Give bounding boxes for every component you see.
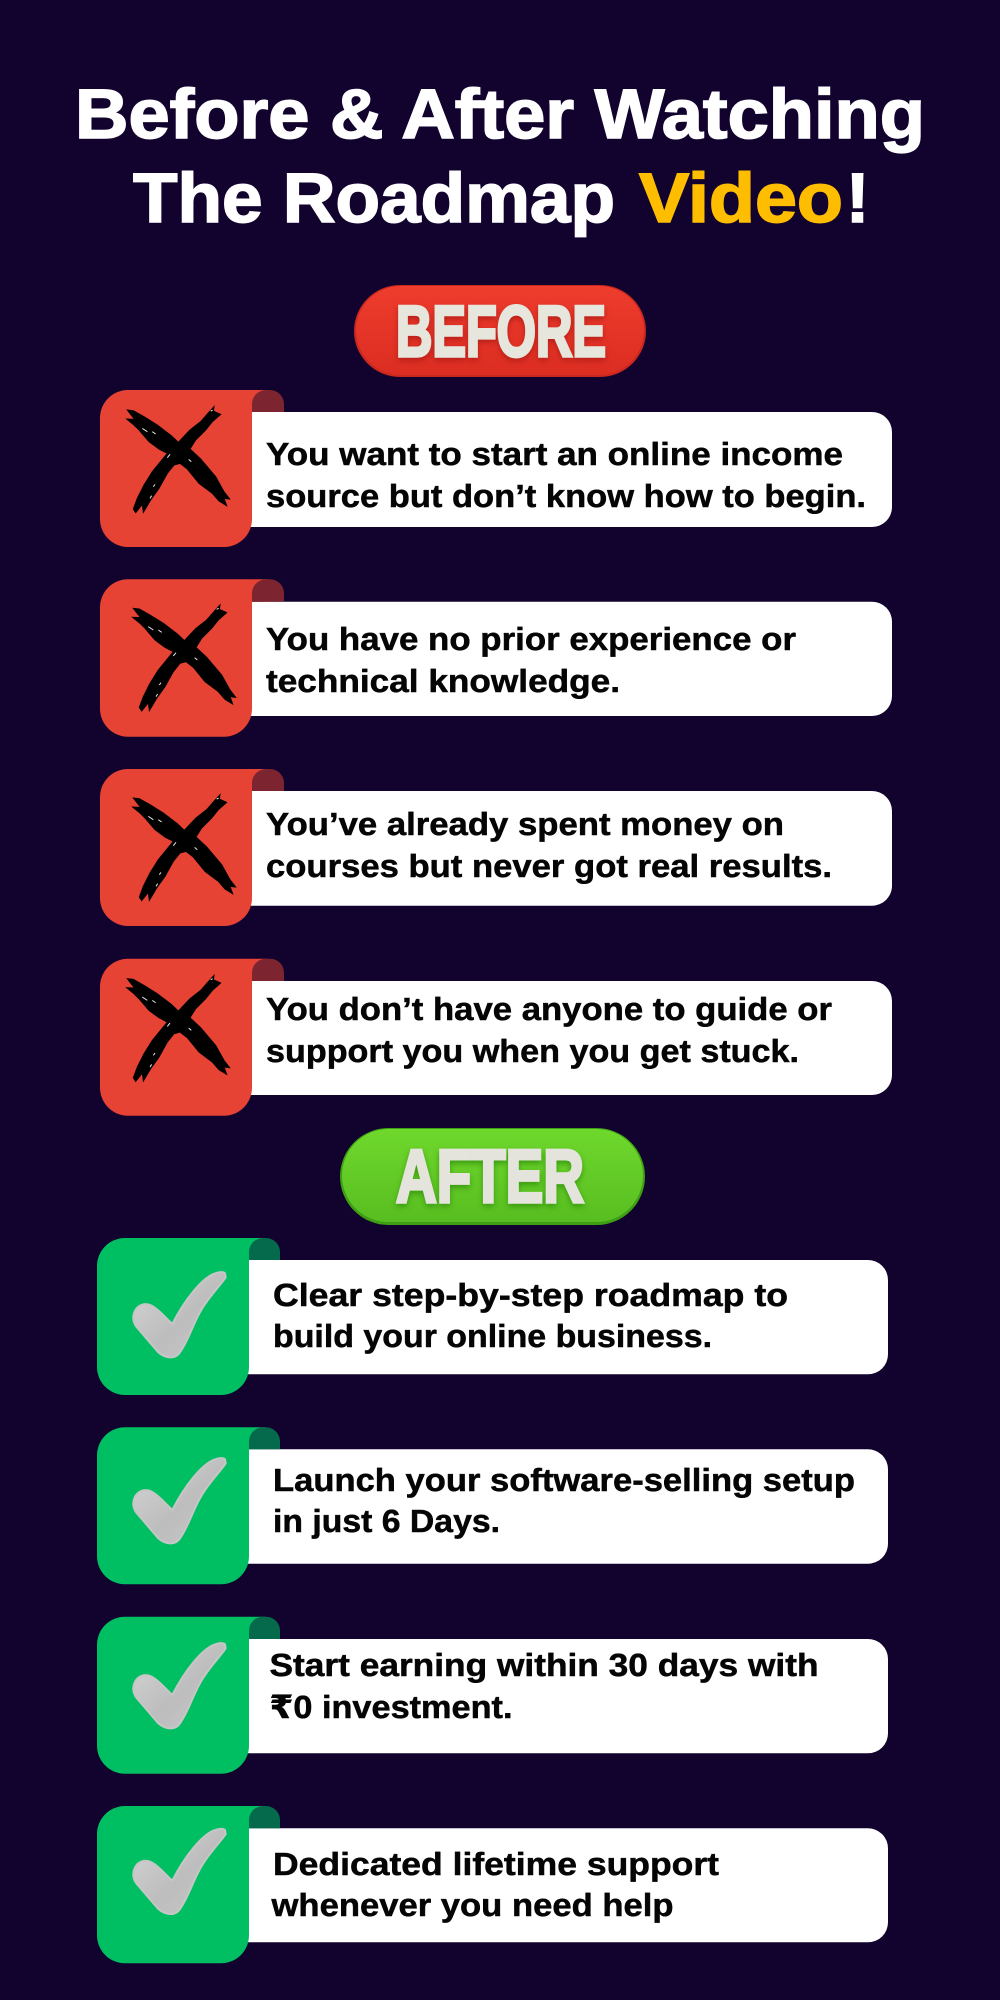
text: You’ve already spent money on <box>266 806 784 842</box>
tile <box>100 390 268 547</box>
tile <box>97 1427 265 1584</box>
text: You have no prior experience or <box>266 621 796 657</box>
title: Video <box>639 159 843 237</box>
text: source but don’t know how to begin. <box>266 478 866 514</box>
tab <box>252 579 284 602</box>
title: ! <box>846 159 869 237</box>
tile <box>97 1806 265 1963</box>
panel: after item 4 <box>97 1806 888 1963</box>
text <box>266 621 796 699</box>
panel: before item 1 <box>100 390 892 547</box>
icon: cross <box>133 795 236 901</box>
text: courses but never got real results. <box>266 848 832 884</box>
panel: before item 3 <box>100 769 892 926</box>
text: support you when you get stuck. <box>266 1033 799 1069</box>
text <box>266 806 832 884</box>
icon: check mark <box>133 1272 226 1357</box>
text <box>266 991 832 1069</box>
text: Launch your software-selling setup <box>273 1462 855 1498</box>
tab <box>252 959 284 981</box>
text: You don’t have anyone to guide or <box>266 991 832 1027</box>
text: in just 6 Days. <box>273 1503 500 1539</box>
tile <box>97 1238 265 1395</box>
tab <box>252 390 284 412</box>
tile <box>100 959 268 1116</box>
text: whenever you need help <box>270 1887 674 1923</box>
tab <box>249 1806 280 1828</box>
text <box>270 1846 719 1923</box>
title: The Roadmap <box>133 159 615 237</box>
heading badge: before: BEFORE <box>396 292 606 372</box>
icon: check mark <box>133 1643 226 1728</box>
icon: cross <box>133 605 236 711</box>
icon: cross <box>127 975 230 1081</box>
text: Start earning within 30 days with <box>270 1647 818 1683</box>
text: Clear step-by-step roadmap to <box>273 1277 788 1313</box>
tile <box>100 769 268 926</box>
icon: cross <box>127 407 230 513</box>
text: You want to start an online income <box>266 436 843 472</box>
text <box>270 1647 818 1725</box>
icon: check mark <box>133 1458 226 1543</box>
text: build your online business. <box>273 1318 712 1354</box>
panel: before item 4 <box>100 959 892 1116</box>
tab <box>249 1238 280 1260</box>
tab <box>252 769 284 791</box>
heading badge: after: AFTER <box>396 1134 584 1218</box>
title: Before & After Watching <box>75 75 925 153</box>
panel: after item 1 <box>97 1238 888 1395</box>
title <box>75 75 925 237</box>
heading badge: before <box>354 285 646 377</box>
text: technical knowledge. <box>266 663 620 699</box>
tab <box>249 1427 280 1449</box>
text <box>266 436 866 514</box>
text <box>273 1277 788 1354</box>
panel: before item 2 <box>100 579 892 737</box>
tile <box>97 1617 265 1774</box>
tab <box>249 1617 280 1639</box>
text: Dedicated lifetime support <box>273 1846 719 1882</box>
panel: after item 2 <box>97 1427 888 1584</box>
tile <box>100 579 268 737</box>
text: ₹0 investment. <box>270 1689 512 1725</box>
text <box>273 1462 855 1539</box>
icon: check mark <box>133 1829 226 1914</box>
panel: after item 3 <box>97 1617 888 1774</box>
